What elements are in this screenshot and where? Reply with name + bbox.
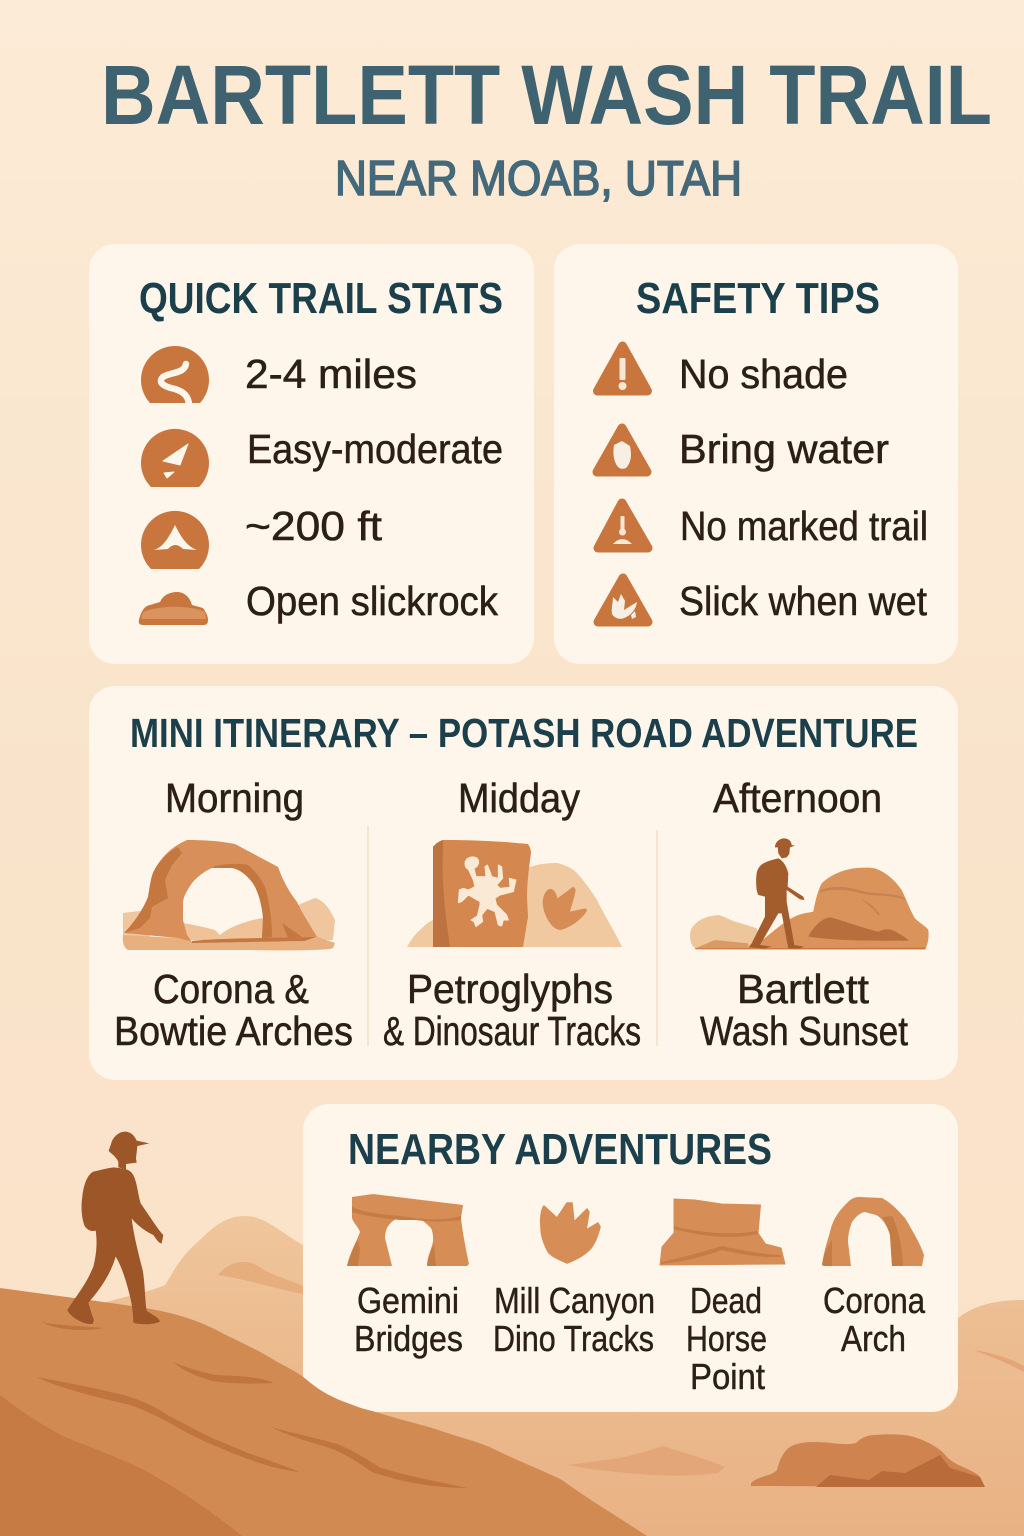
- label: bartlett wash sunset: Bartlett: [737, 966, 870, 1012]
- label: petroglyphs and dinosaur tracks: & Dinosaur Tracks: [383, 1008, 641, 1054]
- icon: dead horse point: [660, 1199, 785, 1265]
- icon: warning water: [597, 428, 647, 472]
- label: petroglyphs and dinosaur tracks: [383, 966, 641, 1054]
- adventure: gemini bridges: [347, 1194, 469, 1359]
- panel: nearby adventures: [303, 1104, 958, 1412]
- column: midday: [383, 775, 641, 1054]
- petroglyph figure: [458, 857, 516, 927]
- heading: quick trail stats: QUICK TRAIL STATS: [139, 274, 503, 323]
- heading: safety tips: SAFETY TIPS: [636, 274, 880, 323]
- label: midday: Midday: [458, 775, 580, 821]
- illustration: petroglyph rock: [407, 840, 622, 947]
- label: dead horse point: Point: [690, 1356, 765, 1397]
- icon: compass arrow: [141, 429, 209, 487]
- adventure: dead horse point: [660, 1199, 785, 1397]
- icon: winding trail: [141, 346, 209, 404]
- label: gemini bridges: Gemini: [357, 1280, 459, 1321]
- label: corona arch: Corona: [823, 1280, 926, 1321]
- icon: gemini bridges: [347, 1194, 469, 1266]
- stat: terrain: Open slickrock: [246, 578, 498, 624]
- stat: difficulty: Easy-moderate: [247, 426, 503, 472]
- dinosaur footprint: [543, 887, 587, 930]
- hiker silhouette: [67, 1132, 163, 1324]
- label: bartlett wash sunset: Wash Sunset: [700, 1008, 909, 1054]
- label: corona and bowtie arches: Corona &: [153, 966, 309, 1012]
- tip: slick when wet: Slick when wet: [679, 578, 928, 624]
- label: corona arch: Arch: [841, 1318, 906, 1359]
- label: mill canyon dino tracks: Mill Canyon: [494, 1280, 655, 1321]
- icon: dinosaur track: [541, 1203, 600, 1263]
- column: morning: [114, 775, 353, 1054]
- adventure: corona arch: [822, 1197, 926, 1359]
- panel: quick trail stats: [89, 244, 534, 664]
- tip: no shade: No shade: [679, 351, 848, 397]
- heading: nearby adventures: NEARBY ADVENTURES: [348, 1125, 772, 1174]
- label: corona and bowtie arches: [114, 966, 353, 1054]
- label: corona and bowtie arches: Bowtie Arches: [114, 1008, 353, 1054]
- label: dead horse point: [686, 1280, 767, 1397]
- illustration: hiker and rock at sunset: [690, 838, 929, 949]
- foreground dune: [0, 1288, 647, 1536]
- label: petroglyphs and dinosaur tracks: Petroglyphs: [407, 966, 613, 1012]
- label: morning: Morning: [165, 775, 304, 821]
- distant desert hills: [100, 1216, 1024, 1536]
- label: mill canyon dino tracks: [493, 1280, 655, 1359]
- icon: warning slick: [598, 578, 648, 622]
- label: bartlett wash sunset: [700, 966, 909, 1054]
- label: dead horse point: Dead: [690, 1280, 762, 1321]
- tip: bring water: Bring water: [679, 426, 889, 472]
- label: corona arch: [823, 1280, 926, 1359]
- adventure: mill canyon dino tracks: [493, 1203, 655, 1359]
- label: afternoon: Afternoon: [713, 775, 882, 821]
- stat: elevation: ~200 ft: [245, 503, 383, 549]
- label: gemini bridges: [354, 1280, 463, 1359]
- label: dead horse point: Horse: [686, 1318, 767, 1359]
- panel: mini itinerary: [89, 686, 958, 1080]
- icon: warning no trail: [598, 503, 648, 548]
- icon: slickrock: [139, 592, 208, 625]
- icon: warning no shade: [598, 346, 648, 391]
- icon: elevation peak: [141, 511, 209, 569]
- stat: distance: 2-4 miles: [245, 351, 417, 397]
- column: afternoon: [690, 775, 929, 1054]
- icon: corona arch: [822, 1197, 924, 1266]
- panel: safety tips: [554, 244, 958, 664]
- subtitle: NEAR MOAB, UTAH: [335, 152, 742, 206]
- label: gemini bridges: Bridges: [354, 1318, 463, 1359]
- illustration: arch: [123, 840, 335, 950]
- label: mill canyon dino tracks: Dino Tracks: [493, 1318, 654, 1359]
- tip: no marked trail: No marked trail: [680, 503, 928, 549]
